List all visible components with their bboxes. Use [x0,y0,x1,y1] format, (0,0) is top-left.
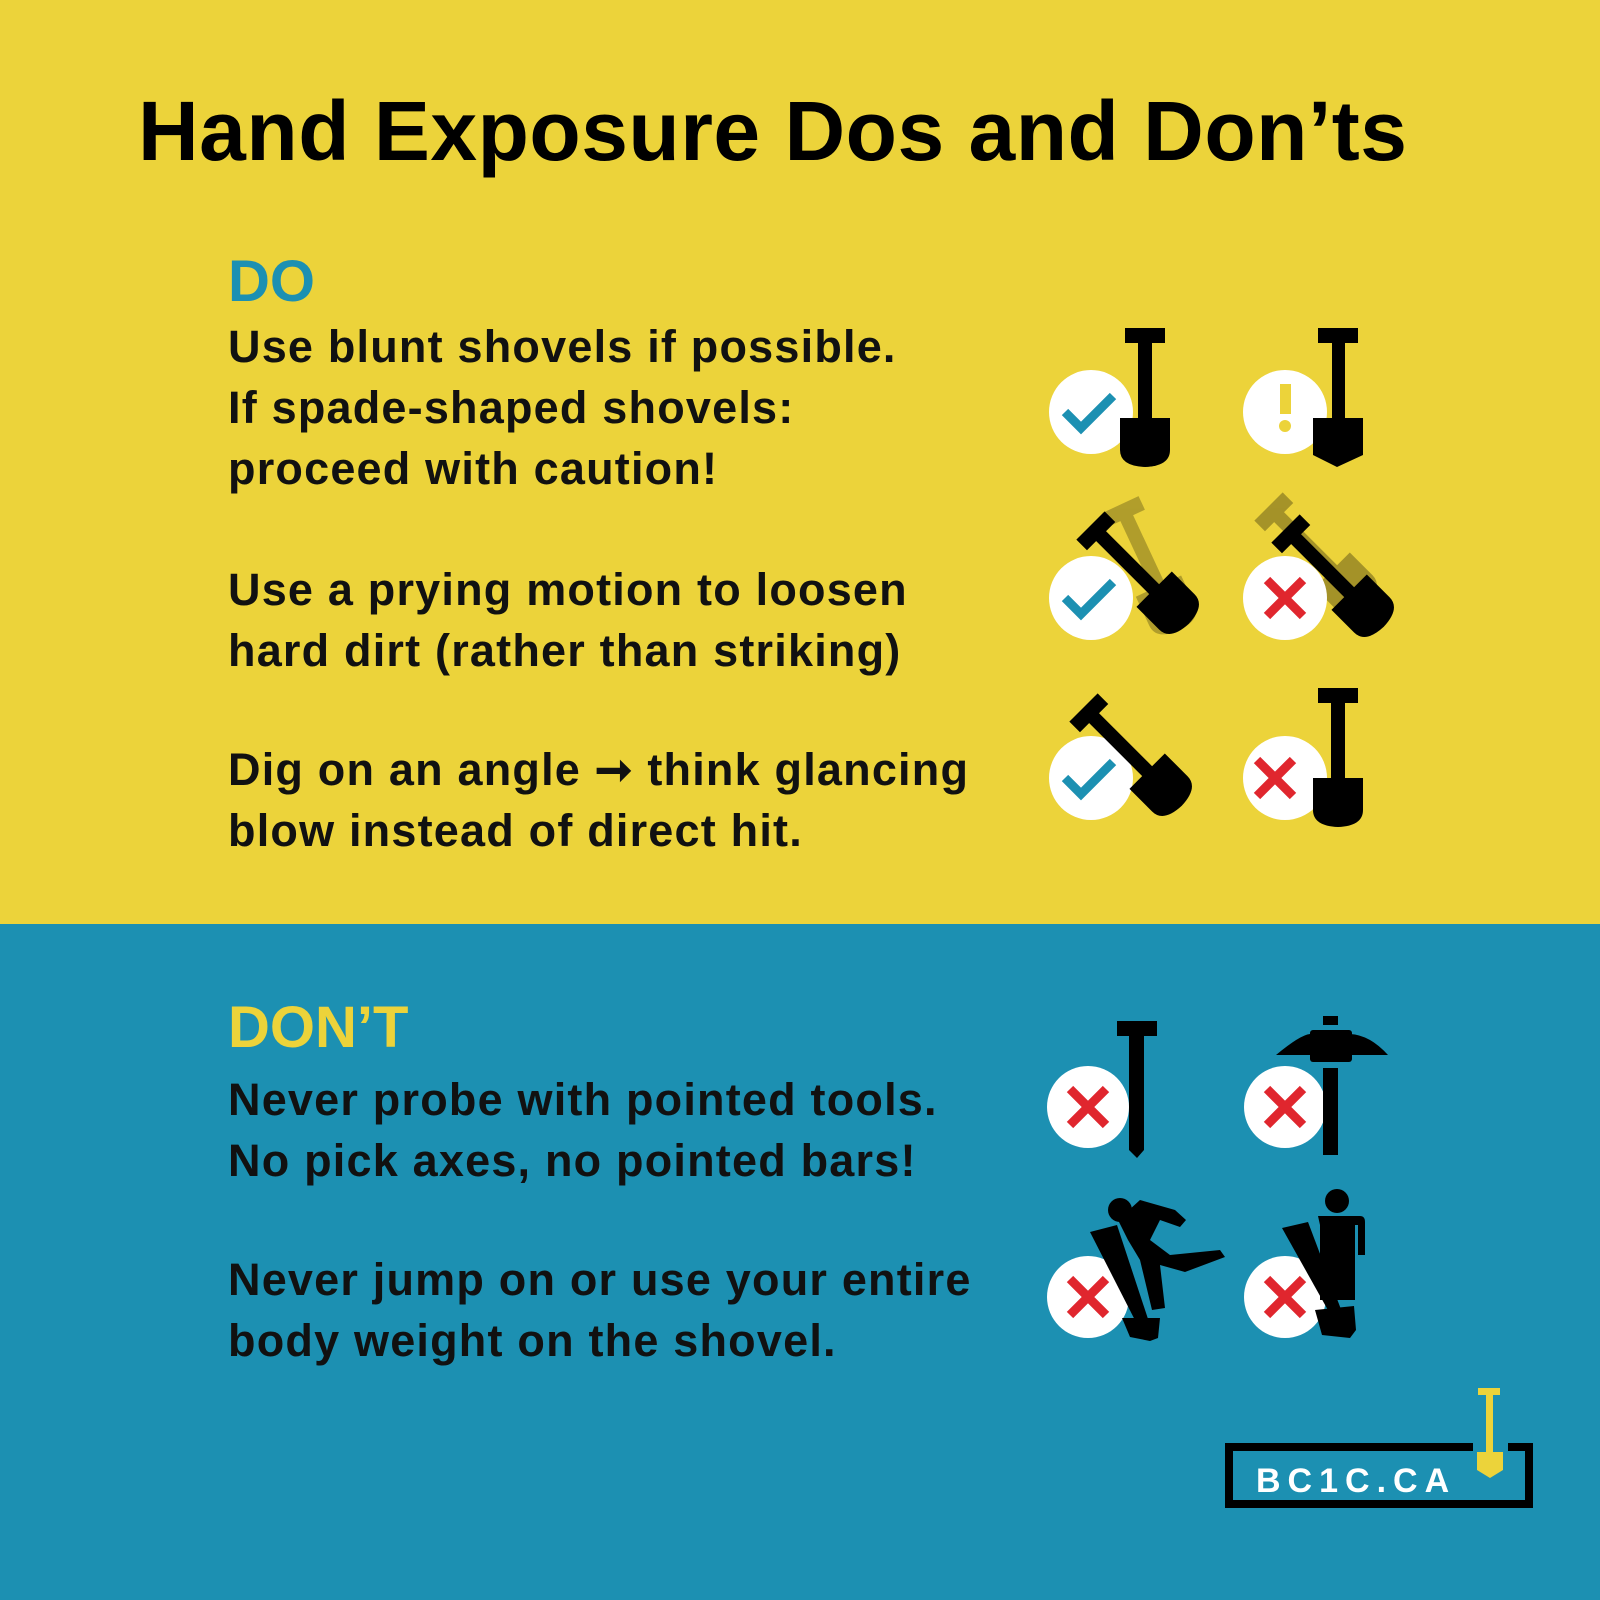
text: prying motion [228,564,908,676]
text: pointed tools: No pick axes, no pointed bars! [228,1135,917,1186]
heading: DO: DO [228,249,315,314]
heading: DON'T: DON’T [228,995,408,1060]
text: jump: body weight on the shovel. [228,1315,837,1366]
logo: BC1C.CA [1229,1388,1529,1504]
icon: pointed bar cross [1047,1021,1157,1158]
icon: direct hit cross [1243,688,1363,827]
text: pointed tools: Never probe with pointed tools. [228,1074,938,1125]
text: prying motion: Use a prying motion to loosen [228,564,908,615]
icon: spade shovel caution [1243,328,1363,467]
icon: pick axe cross [1244,1016,1388,1155]
text: blunt shovels: Use blunt shovels if possible. [228,321,897,372]
icon: angled shovel check [1049,690,1199,823]
text: prying motion: hard dirt (rather than striking) [228,625,901,676]
text: jump [228,1254,972,1366]
icon: striking cross [1243,489,1401,644]
text: jump: Never jump on or use your entire [228,1254,972,1305]
icon: prying check [1049,494,1206,641]
text: blunt shovels: proceed with caution! [228,443,718,494]
text: dig on angle: blow instead of direct hit. [228,805,803,856]
text: blunt shovels: If spade-shaped shovels: [228,382,794,433]
text: dig on angle [228,744,969,856]
text: pointed tools [228,1074,938,1186]
text: dig on angle: Dig on an angle ➞ think glancing [228,744,969,795]
title: Hand Exposure Dos and Don’ts [138,84,1408,178]
logo: BC1C.CA: BC1C.CA [1256,1462,1456,1500]
icon: standing person cross [1244,1189,1365,1338]
text: blunt shovels [228,321,897,494]
icon: blunt shovel check [1049,328,1170,467]
icon: jumping person cross [1047,1198,1225,1341]
